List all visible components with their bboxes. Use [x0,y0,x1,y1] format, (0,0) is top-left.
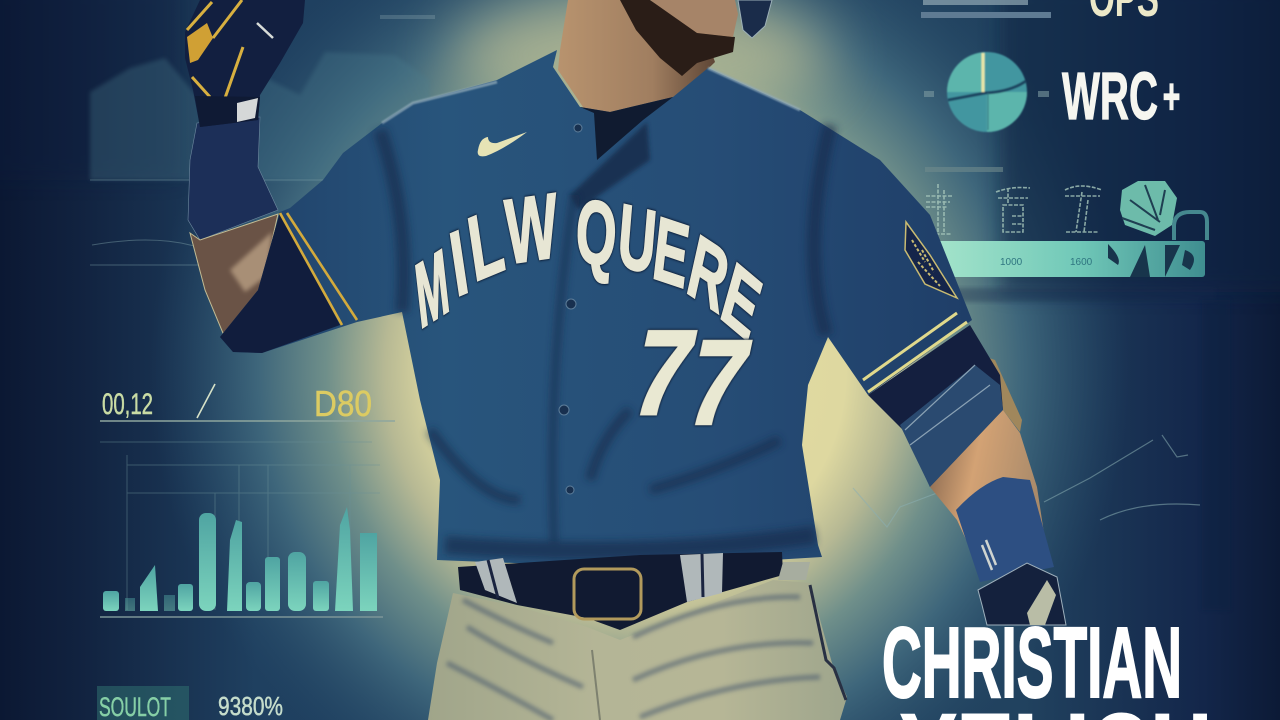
title [882,607,1212,720]
teal value bar: 1000 [1000,257,1023,268]
faded caption [380,15,435,19]
placket fold and shadow [570,122,650,210]
right sleeve band [868,325,1003,487]
jersey buttons [559,124,582,494]
panel: faded top-left area chart [90,15,435,265]
right upper-arm skin sliver [957,347,1022,432]
helmet edge [738,0,772,38]
side piping [810,585,846,700]
panel: faded bottom-right chart [853,288,1230,610]
belt [458,552,810,630]
jersey [220,50,972,568]
face and beard [620,0,738,76]
pie chart [947,52,1027,132]
pant folds [447,597,820,720]
panel: bottom-left stat strip [97,686,283,720]
player figure [185,0,1066,720]
panel: right stats table [925,167,1207,277]
jersey wordmark left: ILW [444,174,560,317]
jersey wordmark right: QUERE [573,178,770,360]
right forearm [930,410,1045,570]
chart heading left value: 00,12 [102,388,153,421]
sleeve trim right [863,313,967,392]
left arm skin [190,214,278,338]
shoulder patch [905,222,957,298]
bars [103,507,377,611]
jersey wordmark: M: M [411,229,453,348]
jersey folds [380,125,830,560]
sketch icons [926,184,1102,234]
panel: bar chart [100,383,395,617]
batting glove raised [185,0,305,127]
center seam [592,650,600,720]
chart heading right value: D80 [314,383,372,424]
teal value bar [925,241,1205,277]
chart slash mark [197,384,215,418]
sleeve trim left [280,213,357,325]
left forearm band [188,117,278,240]
nike swoosh [478,132,527,156]
panel: wRC+ pie [924,52,1180,134]
leaf icon [1120,181,1177,236]
dark under-trim sleeve [220,212,340,353]
jersey number: 77 [619,305,763,450]
WRC+ label: + [1163,69,1180,124]
panel: top-right OPS stat [921,0,1159,28]
undershirt [580,97,673,160]
wristband [956,477,1054,582]
shoulder highlights [382,68,800,123]
hand and glove [978,563,1066,625]
pants [428,580,847,720]
teal value bar: 1600 [1070,257,1093,268]
neck [558,0,715,114]
handle outline [1174,212,1207,240]
WRC+ label: WRC [1062,58,1158,134]
